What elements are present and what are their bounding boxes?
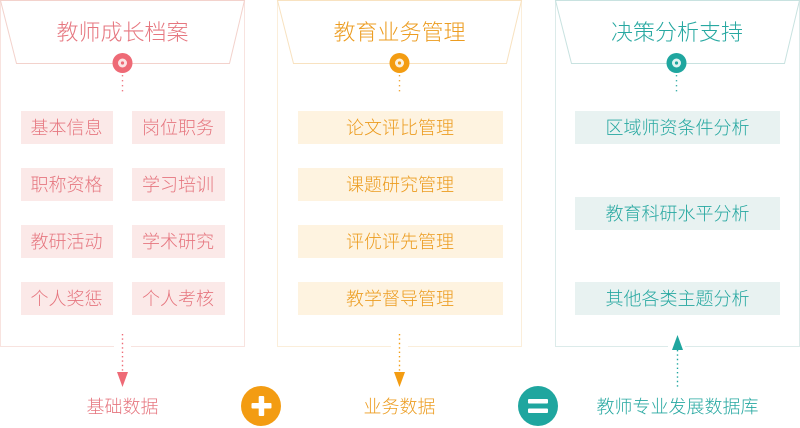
item: 课题研究管理: 课题研究管理 [346,175,454,195]
item: 教育科研水平分析: 教育科研水平分析 [606,204,750,224]
heading banner: 教师成长档案: 教师成长档案 [56,20,189,45]
item: 个人奖惩: 个人奖惩 [30,289,102,309]
item: 论文评比管理 [298,111,503,144]
item: 学习培训 [132,168,225,201]
arrow: down to business data [391,334,408,387]
item: 岗位职务 [132,111,225,144]
item: 评优评先管理 [298,225,503,258]
item: 区域师资条件分析 [575,111,780,144]
item: 课题研究管理 [298,168,503,201]
icon: node [666,53,686,73]
arrow: down to basic data [114,334,131,387]
item: 职称资格 [21,168,113,201]
item: 教学督导管理: 教学督导管理 [346,289,454,309]
icon: node [390,53,410,73]
heading banner: 决策分析支持: 决策分析支持 [611,20,743,45]
heading banner: 教育业务管理 [278,0,522,64]
item: 个人考核 [132,282,225,315]
heading banner: 教师成长档案 [0,0,244,64]
item: 职称资格: 职称资格 [30,175,102,195]
panel: education business management [278,0,522,346]
icon: node [112,53,132,73]
item: 学术研究 [132,225,225,258]
heading banner: 决策分析支持 [556,0,800,64]
heading banner: 教育业务管理: 教育业务管理 [333,20,466,45]
item: 教学督导管理 [298,282,503,315]
connector dots [676,75,678,94]
item: 区域师资条件分析: 区域师资条件分析 [606,118,750,138]
arrow: up to decision support [668,335,685,388]
item: 个人考核: 个人考核 [142,289,214,309]
connector dots [122,75,124,94]
item: 其他各类主题分析 [575,282,780,315]
label: 教师专业发展数据库: 教师专业发展数据库 [596,397,758,417]
item: 教育科研水平分析 [575,197,780,230]
item: 基本信息 [21,111,113,144]
item: 评优评先管理: 评优评先管理 [346,232,454,252]
panel: teacher growth records [0,0,244,346]
item: 教研活动: 教研活动 [30,232,102,252]
item: 其他各类主题分析: 其他各类主题分析 [606,289,750,309]
label: 基础数据: 基础数据 [86,397,158,417]
label: 业务数据: 业务数据 [364,397,436,417]
item: 基本信息: 基本信息 [30,118,102,138]
item: 岗位职务: 岗位职务 [142,118,214,138]
icon: equals [518,386,558,426]
item: 个人奖惩 [21,282,113,315]
item: 论文评比管理: 论文评比管理 [346,118,454,138]
panel: decision analysis support [556,0,800,346]
item: 学习培训: 学习培训 [142,175,214,195]
item: 学术研究: 学术研究 [142,232,214,252]
connector dots [398,75,400,94]
item: 教研活动 [21,225,113,258]
icon: plus [241,386,281,426]
